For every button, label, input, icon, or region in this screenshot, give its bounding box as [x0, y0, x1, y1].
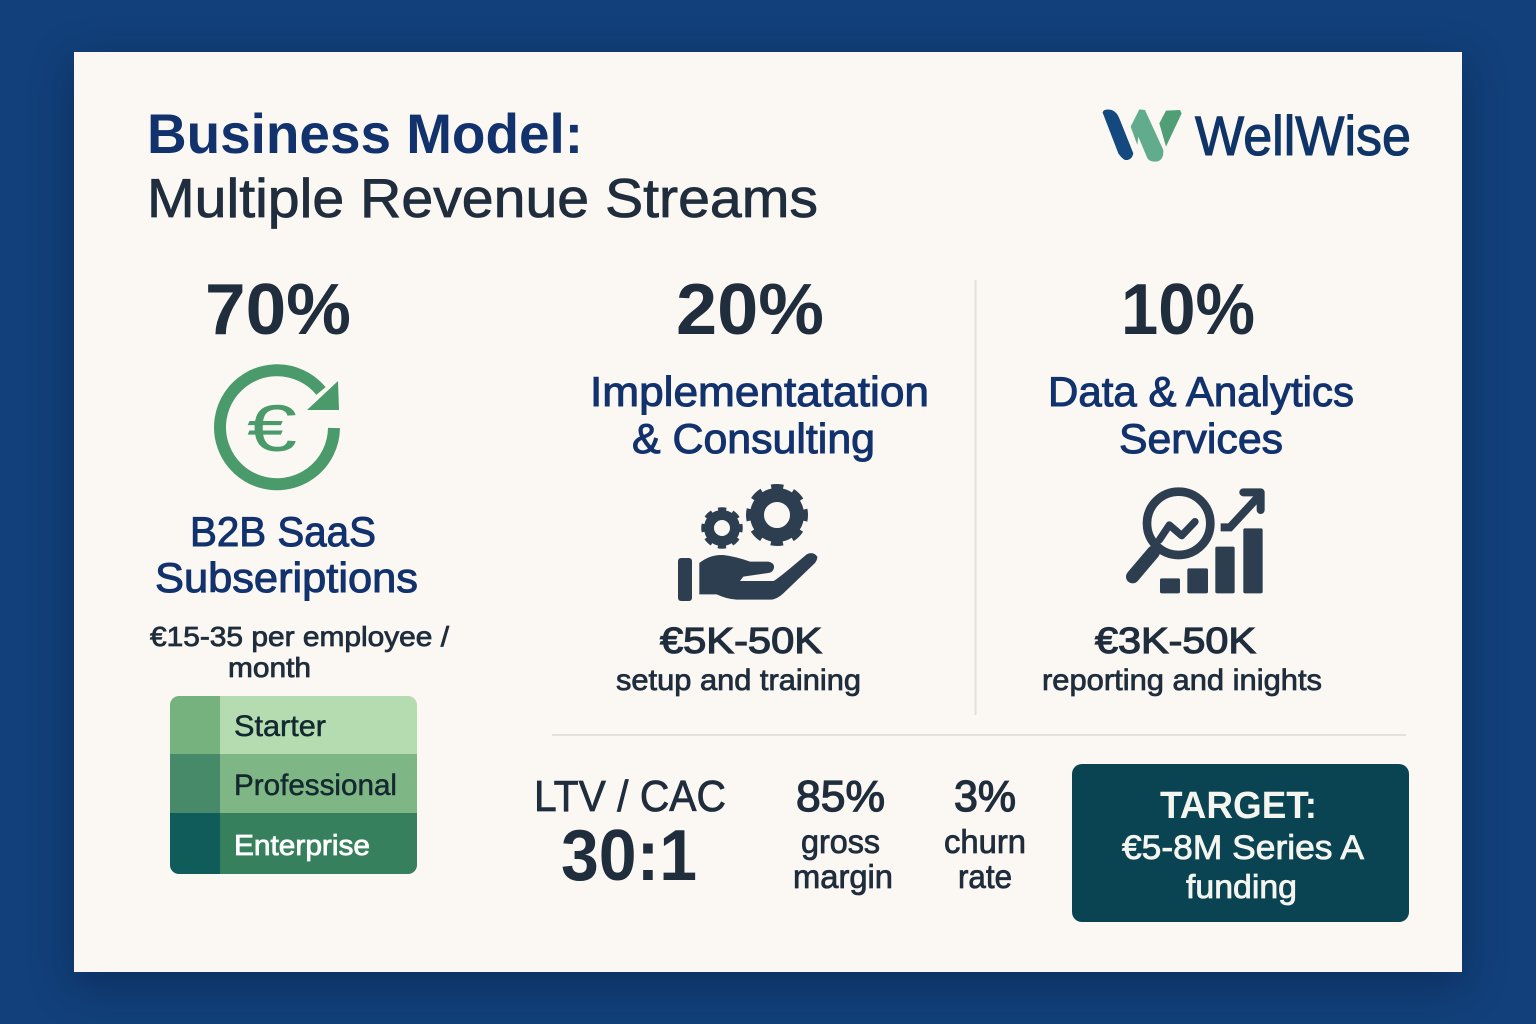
pricing tiers table — [170, 696, 417, 874]
price: reporting and insights: reporting and inights — [1042, 664, 1322, 697]
stat: 20%: 20% — [676, 270, 824, 350]
price: setup and training: setup and training — [616, 664, 861, 697]
price: reporting and insights: €3K-50K — [1095, 620, 1256, 661]
metric: gross margin — [793, 772, 893, 895]
icon: recurring euro: € — [247, 391, 297, 465]
heading: B2B SaaS — [155, 508, 418, 601]
icon: hand with gears — [678, 487, 817, 601]
metric: gross margin: gross — [801, 823, 880, 860]
callout: funding target: funding — [1186, 868, 1297, 905]
metric: LTV / CAC — [534, 772, 726, 896]
metric: LTV / CAC: LTV / CAC — [534, 772, 726, 821]
pricing text: month — [228, 652, 311, 683]
panel: implementation and consulting — [590, 270, 929, 697]
metric: gross margin: 85% — [796, 772, 885, 821]
heading: B2B SaaS: B2B SaaS — [190, 508, 376, 555]
metric: churn rate: 3% — [954, 772, 1016, 821]
callout: funding target — [1072, 764, 1409, 922]
stat: 70%: 70% — [205, 270, 351, 350]
heading: implementation: Implementatation — [590, 368, 929, 415]
price: reporting and insights — [1042, 620, 1322, 697]
metric: churn rate: churn — [944, 823, 1026, 860]
price: setup and training — [616, 620, 861, 697]
heading: data and analytics: Services — [1119, 415, 1283, 462]
callout: funding target: €5-8M Series A — [1122, 829, 1364, 867]
metric: LTV / CAC: 30:1 — [561, 816, 697, 896]
heading: implementation: & Consulting — [632, 415, 875, 462]
pricing tiers table: Professional — [234, 769, 397, 802]
title: Business Model: — [147, 102, 583, 165]
heading: implementation — [590, 368, 929, 462]
stat: 10%: 10% — [1121, 270, 1255, 350]
infographic content — [150, 109, 1410, 922]
title — [147, 102, 818, 229]
logo: WellWise — [1103, 104, 1411, 167]
metric: churn rate — [944, 772, 1026, 895]
icon: magnifier and growth chart — [1133, 492, 1263, 593]
pricing tiers table: Enterprise — [234, 830, 370, 862]
panel: B2B SaaS subscriptions — [150, 270, 449, 874]
price: setup and training: €5K-50K — [660, 620, 822, 661]
metric: churn rate: rate — [958, 858, 1012, 895]
icon: recurring euro — [220, 370, 339, 484]
logo: WellWise: WellWise — [1195, 104, 1411, 167]
panel: data and analytics — [1042, 270, 1354, 697]
heading: data and analytics: Data & Analytics — [1048, 368, 1354, 415]
heading: data and analytics — [1048, 368, 1354, 462]
callout: funding target: TARGET: — [1160, 785, 1317, 827]
heading: B2B SaaS: Subseriptions — [155, 554, 418, 601]
pricing tiers table: Starter — [234, 710, 326, 743]
divider — [974, 280, 976, 715]
icon: logo mark — [1103, 109, 1182, 162]
metric: gross margin: margin — [793, 858, 893, 895]
divider — [552, 734, 1406, 736]
title: Multiple Revenue Streams — [147, 167, 818, 229]
pricing text — [150, 621, 449, 683]
pricing text: €15-35 per employee / — [150, 621, 449, 652]
